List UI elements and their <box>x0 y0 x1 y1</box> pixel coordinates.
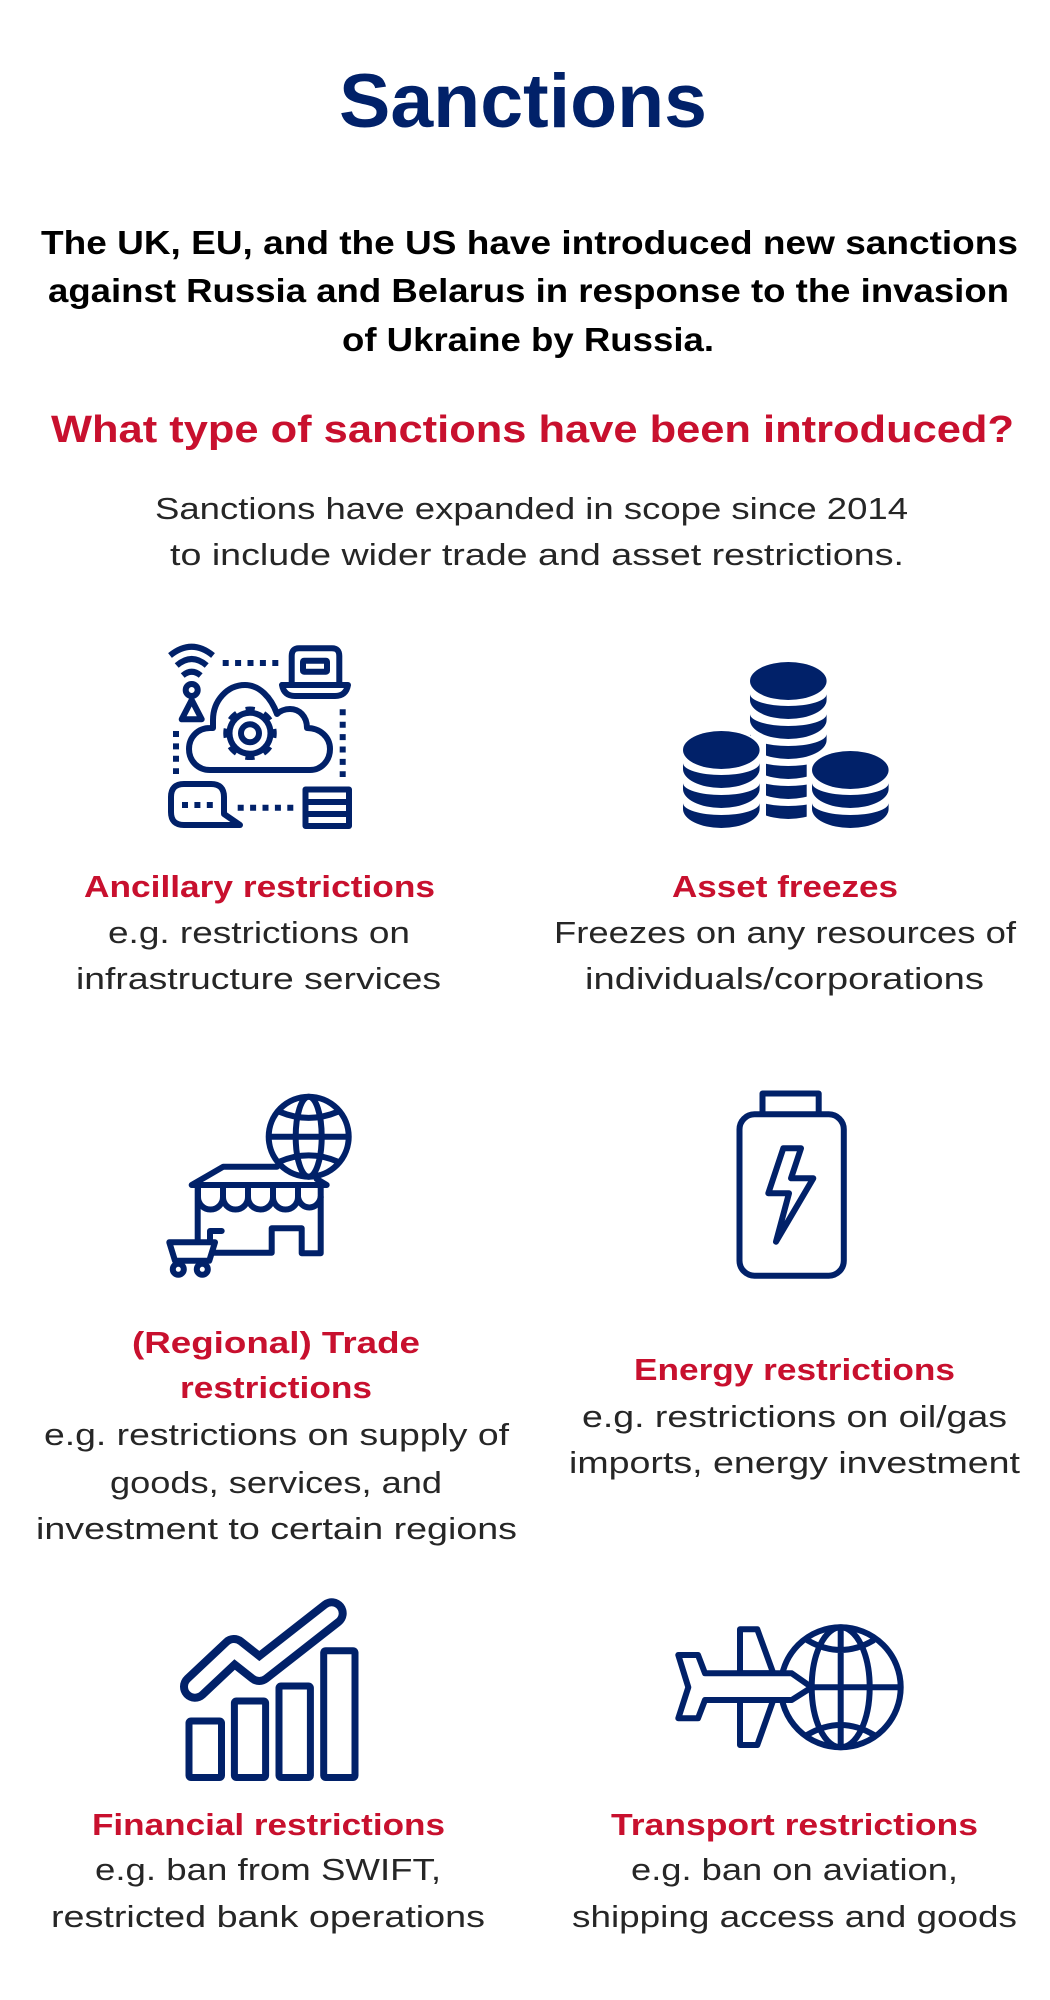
label: asset freezes: Asset freezes <box>672 869 898 904</box>
title: Sanctions <box>339 59 707 144</box>
label: regional trade restrictions: (Regional) Trade <box>132 1325 420 1360</box>
description: e.g. restrictions on oil/gas <box>582 1399 1007 1434</box>
description <box>51 1852 485 1934</box>
panel: energy restrictions <box>569 1094 1020 1480</box>
description: e.g. ban on aviation, <box>631 1852 958 1887</box>
label: financial restrictions: Financial restrictions <box>92 1807 445 1842</box>
label: ancillary restrictions: Ancillary restrictions <box>84 869 435 904</box>
panel: asset freezes <box>554 662 1016 996</box>
panel: financial restrictions <box>51 1613 485 1934</box>
label: regional trade restrictions <box>132 1325 420 1405</box>
description: restricted bank operations <box>51 1899 485 1934</box>
intro text block: of Ukraine by Russia. <box>342 321 714 358</box>
description <box>554 915 1016 996</box>
panel: transport restrictions <box>572 1627 1017 1934</box>
icon: store, globe and cart <box>169 1097 349 1275</box>
panel: ancillary restrictions <box>76 647 441 996</box>
icon: battery <box>740 1094 844 1276</box>
label: transport restrictions: Transport restrictions <box>611 1807 978 1842</box>
intro text block <box>41 224 1018 358</box>
description: shipping access and goods <box>572 1899 1017 1934</box>
description: imports, energy investment <box>569 1445 1020 1480</box>
label: energy restrictions: Energy restrictions <box>634 1352 955 1387</box>
intro text block: against Russia and Belarus in response to the invasion <box>48 272 1009 309</box>
panel: regional trade restrictions <box>36 1097 517 1546</box>
description: goods, services, and <box>110 1465 442 1500</box>
description <box>76 915 441 996</box>
description <box>572 1852 1017 1934</box>
description: infrastructure services <box>76 961 441 996</box>
subheading text: Sanctions have expanded in scope since 2014 <box>155 491 908 526</box>
description <box>569 1399 1020 1480</box>
intro text block: The UK, EU, and the US have introduced new sanctions <box>41 224 1018 261</box>
subheading text: to include wider trade and asset restrictions. <box>170 537 904 572</box>
description: investment to certain regions <box>36 1511 517 1546</box>
icon: cloud network <box>170 647 349 826</box>
label: regional trade restrictions: restrictions <box>180 1370 372 1405</box>
icon: plane and globe <box>678 1627 901 1747</box>
description: e.g. ban from SWIFT, <box>95 1852 441 1887</box>
icon: bar chart with trend line <box>189 1613 355 1778</box>
description: individuals/corporations <box>585 961 984 996</box>
description <box>36 1417 517 1546</box>
description: e.g. restrictions on supply of <box>44 1417 509 1452</box>
description: e.g. restrictions on <box>108 915 410 950</box>
section heading: What type of sanctions have been introduced? <box>51 409 1014 451</box>
subheading text <box>155 491 908 572</box>
icon: coin stacks <box>683 662 889 835</box>
description: Freezes on any resources of <box>554 915 1016 950</box>
